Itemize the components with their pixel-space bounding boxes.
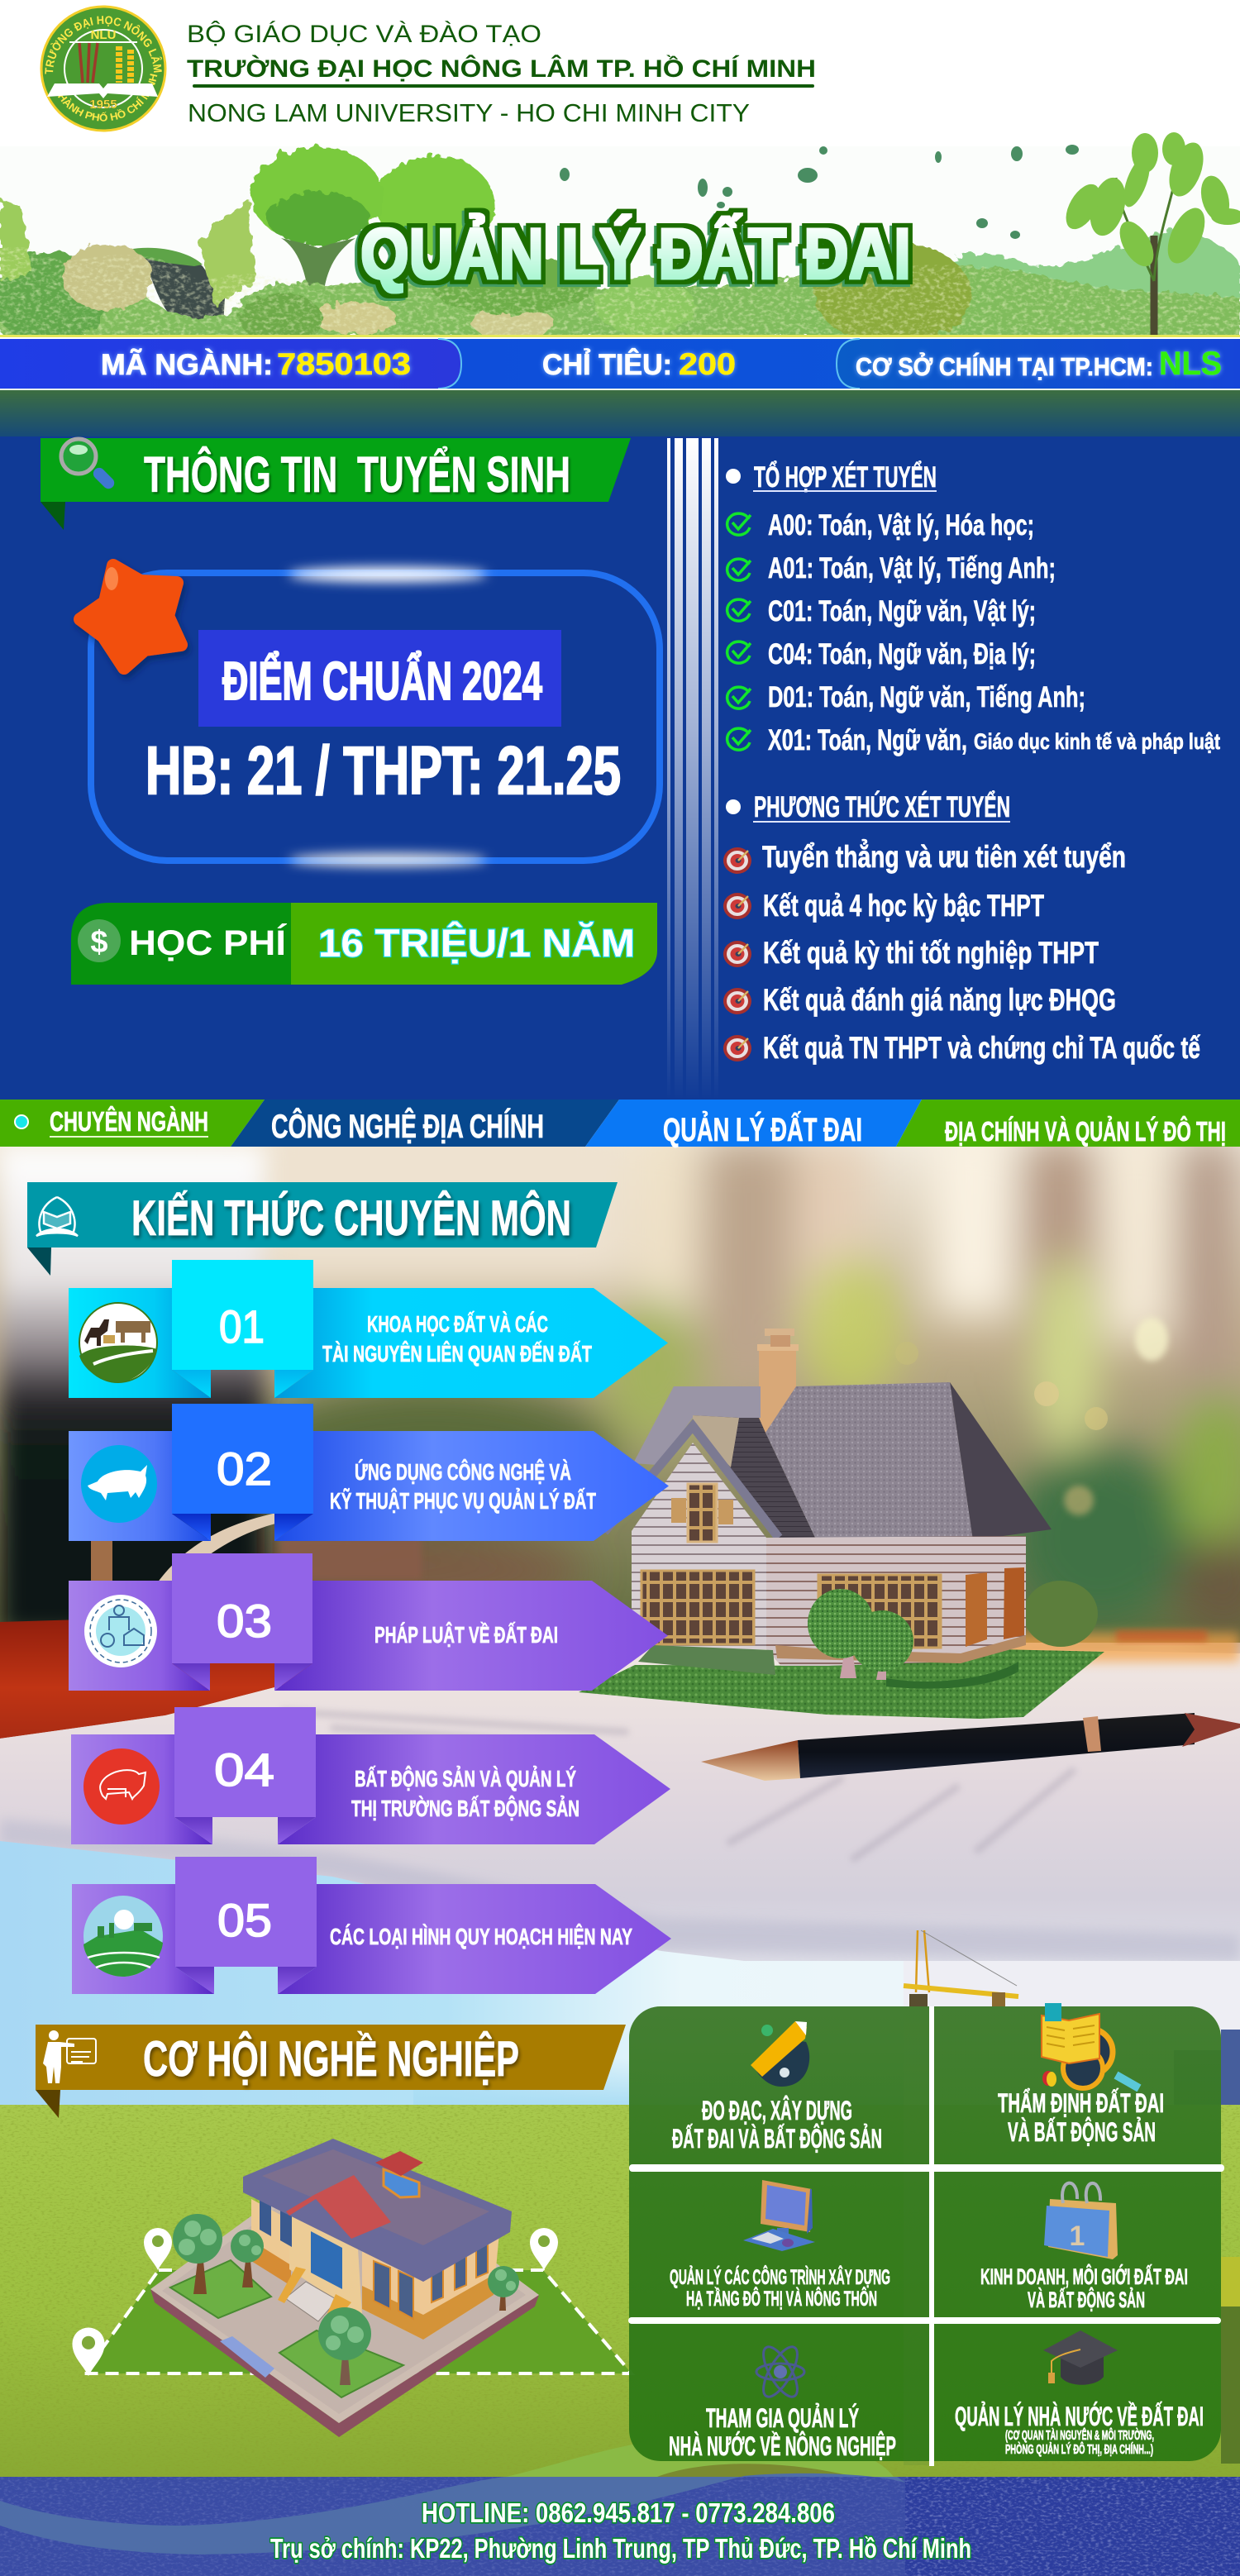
cell: brokerage: VÀ BẤT ĐỘNG SẢN <box>1028 2286 1145 2312</box>
row A00: A00: Toán, Vật lý, Hóa học; <box>768 509 1034 541</box>
row C01 <box>727 595 1036 627</box>
icon: book and magnifier <box>1042 2003 1139 2088</box>
heading <box>726 460 937 494</box>
label: CHUYÊN NGÀNH <box>50 1106 208 1137</box>
icon: pig on blue circle <box>81 1445 157 1523</box>
description: TÀI NGUYÊN LIÊN QUAN ĐẾN ĐẤT <box>322 1341 592 1367</box>
hotline text: HOTLINE: 0862.945.817 - 0773.284.806 <box>422 2497 835 2528</box>
program code: MÃ NGÀNH: <box>101 348 273 381</box>
method 3: Kết quả kỳ thi tốt nghiệp THPT <box>763 936 1099 970</box>
banner: foliage texture <box>0 240 1240 337</box>
shutters <box>966 1567 1024 1647</box>
icon: graduation cap <box>1043 2330 1118 2385</box>
heading: admissions information: THÔNG TIN TUYỂN SINH <box>144 446 570 503</box>
roof gable dark <box>693 1415 815 1538</box>
description: KHOA HỌC ĐẤT VÀ CÁC <box>367 1311 548 1337</box>
banner: right mound <box>909 227 1240 337</box>
light glare top <box>289 567 487 582</box>
roof left back <box>633 1386 761 1465</box>
cell: surveying: ĐO ĐẠC, XÂY DỰNG <box>702 2096 852 2125</box>
list: subject combinations <box>726 460 1220 756</box>
header text block <box>187 20 816 127</box>
tuition bar <box>71 903 657 985</box>
cell: construction management <box>670 2180 890 2311</box>
tuition bar: HỌC PHÍ <box>129 923 287 963</box>
row X01 <box>727 724 1220 756</box>
description: PHÁP LUẬT VỀ ĐẤT ĐAI <box>374 1622 558 1648</box>
trees <box>173 2214 519 2385</box>
icon: dollar coin: $ <box>90 925 108 960</box>
steel-blue wave band <box>0 2473 905 2555</box>
header text block: TRƯỜNG ĐẠI HỌC NÔNG LÂM TP. HỒ CHÍ MINH <box>187 55 816 83</box>
icon: farm landscape <box>83 1896 163 1977</box>
program code <box>101 347 411 381</box>
description: ỨNG DỤNG CÔNG NGHỆ VÀ <box>355 1458 571 1485</box>
description: BẤT ĐỘNG SẢN VÀ QUẢN LÝ <box>355 1765 576 1791</box>
banner: tree trunk <box>281 238 355 306</box>
card 04: real estate <box>71 1707 670 1844</box>
pen <box>701 1713 1240 1781</box>
university logo: NLU <box>91 28 116 42</box>
cell: appraisal <box>998 2003 1164 2147</box>
number: 03 <box>217 1595 272 1647</box>
score label: ĐIỂM CHUẨN 2024 <box>222 651 542 711</box>
icon: orange star <box>80 565 181 668</box>
number: 05 <box>217 1894 272 1946</box>
campus code: NLS <box>1159 346 1222 382</box>
university logo: THÀNH PHỐ HỒ CHÍ MINH <box>58 74 157 122</box>
low hedge <box>638 1645 775 1675</box>
background photo: crane and buildings <box>904 1930 1240 2257</box>
lawns <box>170 2260 403 2397</box>
university logo: TRƯỜNG ĐẠI HỌC NÔNG LÂM <box>45 16 162 74</box>
marker dot <box>15 1115 28 1128</box>
lawn base <box>579 1649 1104 1719</box>
chimney <box>757 1329 799 1435</box>
footer band <box>0 2439 1240 2576</box>
panel: career grid <box>628 2003 1224 2466</box>
roof right hip <box>950 1382 1052 1540</box>
method 2: Kết quả 4 học kỳ bậc THPT <box>763 889 1044 923</box>
icon: farm animals <box>79 1303 157 1382</box>
method 3 <box>723 936 1099 970</box>
crane <box>904 1930 1018 2006</box>
heading: career opportunities <box>36 2025 626 2118</box>
specialization 1: CÔNG NGHỆ ĐỊA CHÍNH <box>271 1107 544 1145</box>
info bar: left segment <box>0 339 461 389</box>
cell: land state management <box>955 2330 1204 2457</box>
photo: red table <box>0 1612 595 1739</box>
photo: documents on the desk <box>0 1630 1240 1961</box>
description <box>330 1458 596 1514</box>
cell: agriculture state management <box>669 2342 896 2461</box>
banner: rock <box>136 251 225 331</box>
icon: dollar coin <box>78 919 121 962</box>
icon: calendar: 1 <box>1070 2221 1085 2252</box>
quota <box>542 347 736 381</box>
strip under info bar <box>0 390 1240 436</box>
cell: surveying: ĐẤT ĐAI VÀ BẤT ĐỘNG SẢN <box>672 2124 882 2154</box>
list: admission methods <box>723 790 1200 1065</box>
card 03: land law <box>69 1553 668 1691</box>
location pins <box>72 2228 558 2376</box>
heading: professional knowledge <box>27 1182 618 1276</box>
icon: atom <box>756 2342 804 2402</box>
description <box>322 1311 592 1367</box>
score label <box>198 630 561 727</box>
icon: presenter at board <box>43 2030 96 2083</box>
row C04 <box>727 638 1036 670</box>
cell: agriculture state management: NHÀ NƯỚC VỀ NÔNG NGHIỆP <box>669 2431 896 2461</box>
row C01: C01: Toán, Ngữ văn, Vật lý; <box>768 595 1036 627</box>
school roof <box>243 2139 512 2282</box>
row D01: D01: Toán, Ngữ văn, Tiếng Anh; <box>768 681 1085 713</box>
row A01: A01: Toán, Vật lý, Tiếng Anh; <box>768 552 1056 584</box>
row D01 <box>727 681 1085 713</box>
heading: PHƯƠNG THỨC XÉT TUYỂN <box>754 790 1010 823</box>
rooftop cupola <box>375 2151 423 2197</box>
row A00 <box>727 509 1034 541</box>
description: CÁC LOẠI HÌNH QUY HOẠCH HIỆN NAY <box>330 1924 632 1949</box>
campus code: CƠ SỞ CHÍNH TẠI TP.HCM: <box>856 351 1153 381</box>
light glare bottom <box>289 853 487 866</box>
description: KỸ THUẬT PHỤC VỤ QUẢN LÝ ĐẤT <box>330 1487 596 1514</box>
banner: right sapling <box>1059 132 1240 347</box>
photo: dark left shade <box>0 1147 265 1634</box>
bench <box>220 2336 274 2378</box>
cell: construction management: QUẢN LÝ CÁC CÔNG TRÌNH XÂY DỰNG <box>670 2264 890 2289</box>
white header strip <box>0 0 1240 146</box>
address text: Trụ sở chính: KP22, Phường Linh Trung, TP Thủ Đức, TP. Hồ Chí Minh <box>270 2533 971 2564</box>
large front window <box>641 1571 754 1644</box>
header text block: BỘ GIÁO DỤC VÀ ĐÀO TẠO <box>187 20 541 48</box>
plot outline <box>84 2270 632 2373</box>
info bar: right segment <box>837 339 1240 389</box>
description: THỊ TRƯỜNG BẤT ĐỘNG SẢN <box>351 1795 579 1821</box>
banner: ground foliage <box>0 198 1240 345</box>
specialization bar <box>0 1100 1240 1148</box>
background photo: house model on documents <box>0 1116 1240 2116</box>
icon: pig outline on red circle <box>83 1748 160 1825</box>
navy admissions panel <box>0 436 1240 1100</box>
program code: 7850103 <box>277 347 411 381</box>
heading: TỔ HỢP XÉT TUYỂN <box>754 460 937 494</box>
info bar <box>0 335 1240 390</box>
heading: professional knowledge: KIẾN THỨC CHUYÊN MÔN <box>131 1190 571 1246</box>
number: 02 <box>217 1443 272 1495</box>
row A01 <box>727 552 1056 584</box>
icon: farmer and barn <box>84 1595 157 1667</box>
cell: construction management: HẠ TẦNG ĐÔ THỊ VÀ NÔNG THÔN <box>686 2286 877 2311</box>
career illustration: school on land plot <box>72 2139 632 2437</box>
trees at front <box>808 1589 913 1680</box>
illustration: model house <box>579 1329 1240 1781</box>
right shrub <box>1023 1581 1098 1647</box>
tuition bar: 16 TRIỆU/1 NĂM <box>318 921 635 965</box>
card 02: technology application <box>69 1404 669 1541</box>
heading: career opportunities: CƠ HỘI NGHỀ NGHIỆP <box>143 2031 519 2087</box>
description <box>351 1765 579 1821</box>
main title: QUẢN LÝ ĐẤT ĐAI <box>360 214 911 294</box>
icon: computer <box>743 2180 815 2251</box>
cell: brokerage <box>980 2183 1188 2312</box>
cell: agriculture state management: THAM GIA QUẢN LÝ <box>706 2403 859 2433</box>
icon: magnifier <box>61 439 117 491</box>
door and stairs <box>278 2231 351 2330</box>
icon: pencil and tools <box>751 2021 809 2087</box>
card 05: planning types <box>72 1857 671 1994</box>
row C04: C04: Toán, Ngữ văn, Địa lý; <box>768 638 1036 670</box>
header text block: NONG LAM UNIVERSITY - HO CHI MINH CITY <box>188 98 750 127</box>
method 1 <box>723 839 1126 874</box>
score values: HB: 21 / THPT: 21.25 <box>145 733 621 809</box>
right wall windows <box>818 1575 941 1648</box>
number: 04 <box>214 1744 274 1796</box>
gable wall <box>632 1443 766 1649</box>
method 2 <box>723 889 1044 923</box>
platform <box>150 2149 539 2437</box>
heading: admissions information <box>41 438 631 530</box>
card 01: soil science <box>69 1260 668 1398</box>
photo: blurred forest backdrop <box>0 1116 1240 1643</box>
number: 01 <box>219 1300 265 1352</box>
quota: CHỈ TIÊU: <box>542 348 672 381</box>
row X01: X01: Toán, Ngữ văn, <box>768 724 967 756</box>
method 1: Tuyển thẳng và ưu tiên xét tuyển <box>762 839 1126 874</box>
method 4 <box>723 983 1116 1017</box>
heading <box>726 790 1010 823</box>
quota: 200 <box>679 347 736 381</box>
method 4: Kết quả đánh giá năng lực ĐHQG <box>763 983 1116 1017</box>
photo: sky below the documents <box>0 1841 1240 2116</box>
specialization 2: QUẢN LÝ ĐẤT ĐAI <box>663 1110 862 1148</box>
green wave above footer <box>506 2439 894 2477</box>
background photo: grass field <box>0 2105 1240 2485</box>
vertical light stripes <box>667 438 718 1100</box>
banner: left trees <box>250 147 494 255</box>
panel: benchmark score <box>80 565 660 866</box>
school walls <box>251 2182 499 2340</box>
university logo <box>40 5 167 132</box>
roof main <box>765 1382 973 1539</box>
university logo: 1955 <box>89 98 117 112</box>
cell: surveying <box>672 2021 882 2154</box>
icon: calendar <box>1044 2183 1118 2259</box>
red gable roof <box>286 2175 391 2239</box>
photo: wood stool and beam <box>91 1511 422 1624</box>
banner: flying leaves <box>560 145 1079 239</box>
top banner: nature scene <box>0 132 1240 347</box>
icon: open book emblem <box>36 1197 78 1236</box>
upper gable windows <box>671 1484 733 1542</box>
right wall <box>766 1536 1026 1666</box>
